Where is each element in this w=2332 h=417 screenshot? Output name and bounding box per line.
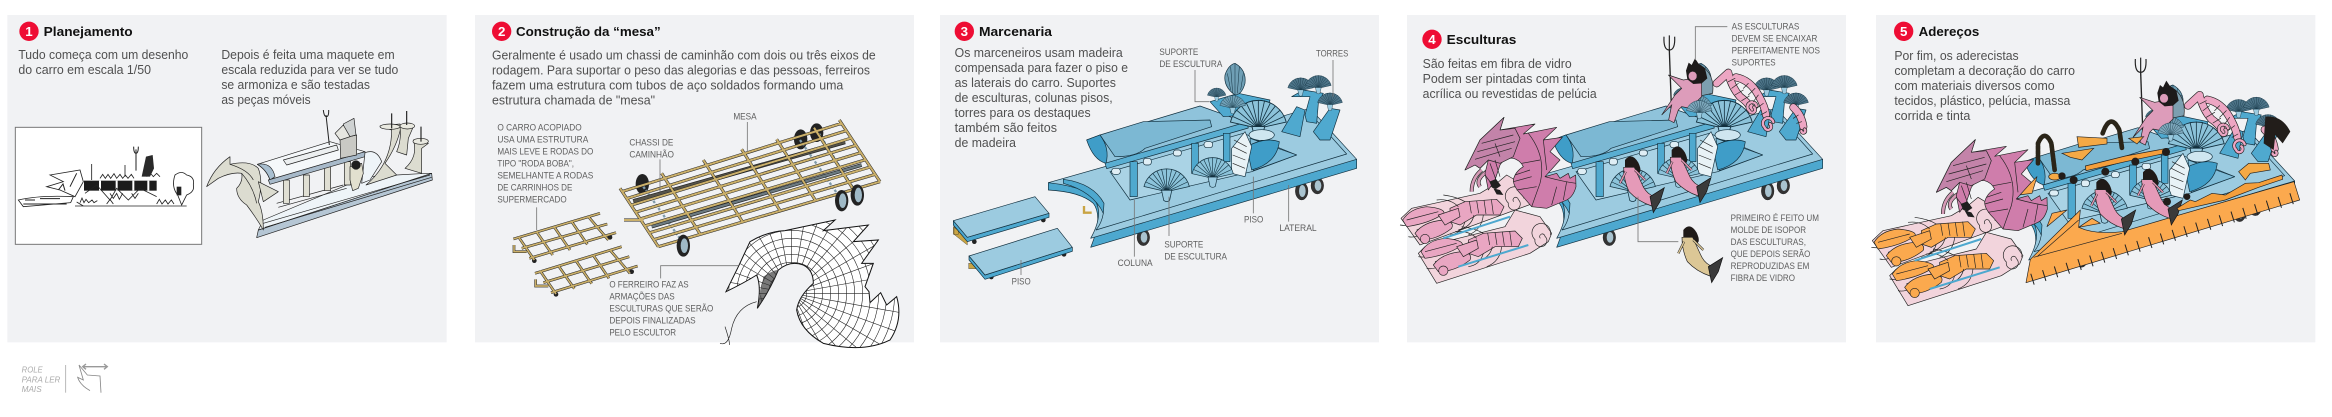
label: molde de isopor: DAS ESCULTURAS, [1731,237,1806,247]
label: molde de isopor: QUE DEPOIS SERÃO [1731,249,1810,259]
label: as esculturas devem se encaixar: SUPORTES [1732,57,1776,67]
label: mesa: MESA [733,111,757,121]
label: carro acoplado: MAIS LEVE E RODAS DO [497,147,593,157]
panel: 5 Adereços [1871,15,2315,342]
label: as esculturas devem se encaixar: PERFEITAMENTE NOS [1732,45,1820,55]
label: as esculturas devem se encaixar [1695,21,1820,67]
wire armature of dragon sculpture [720,219,900,348]
text block: fibra de vidro: acrílica ou revestidas de pelúcia [1423,87,1598,101]
label: mesa [733,111,757,152]
panel: 1 Planejamento [7,15,447,394]
label: suporte de escultura bottom: SUPORTE [1164,240,1203,250]
panel: 3 Marcenaria [940,15,1379,342]
number badge 2 [492,22,511,41]
dark ornaments on rail [2058,148,2190,206]
sculptures in colour with orange lobsters [1871,58,2277,306]
label: ferreiro: O FERREIRO FAZ AS [609,280,689,290]
label: ferreiro: ESCULTURAS QUE SERÃO [609,304,713,314]
label: molde de isopor [1638,197,1819,283]
scroll hint: MAIS [22,384,42,394]
label: molde de isopor: MOLDE DE ISOPOR [1731,225,1806,235]
text block: marceneiros: de madeira [955,136,1017,150]
label: carro acoplado: USA UMA ESTRUTURA [497,135,588,145]
label: molde de isopor: PRIMEIRO É FEITO UM [1731,213,1819,223]
text block: marceneiros: torres para os destaques [955,106,1091,120]
label: torres [1316,49,1348,97]
label: carro acoplado [497,123,593,230]
orange decorated skirt [2019,177,2300,283]
label: carro acoplado: TIPO "RODA BOBA", [497,159,574,169]
label: carro acoplado: O CARRO ACOPIADO [497,123,582,133]
text block: aderecistas: com materiais diversos como [1894,79,2055,93]
decorative arches [2038,122,2122,170]
label: chassi de caminhão: CAMINHÃO [629,150,674,160]
label: suporte de escultura top: DE ESCULTURA [1159,59,1222,69]
label: piso dolly [1012,260,1031,287]
label: suporte de escultura top [1159,47,1222,102]
separate mermaid mould [1678,226,1723,283]
text block: maquete: se armoniza e são testadas [221,78,370,92]
truck chassis and mesa frame [620,120,880,257]
text block: fibra de vidro: São feitas em fibra de vidro [1423,57,1572,71]
text block: aderecistas: corrida e tinta [1894,109,1971,123]
panel: 2 Construção da mesa [475,15,914,348]
number badge 1 [19,22,39,41]
label: suporte de escultura top: SUPORTE [1159,47,1198,57]
label: suporte de escultura bottom [1164,197,1227,262]
label: ferreiro: ARMAÇÕES DAS [609,292,675,302]
label: carro acoplado: SEMELHANTE A RODAS [497,171,593,181]
text block: marceneiros: compensada para fazer o piso e [955,61,1128,75]
sketch of the float in a framed box [15,127,202,244]
text block: chassi: estrutura chamada de "mesa" [492,93,655,107]
scroll hint: PARA LER [22,374,60,384]
number badge 1: 1 [25,24,33,39]
text block: desenho: Tudo começa com um desenho [18,48,188,62]
float structure [1986,85,2295,269]
label: piso dolly: PISO [1012,277,1031,287]
number badge 2: 2 [498,24,505,39]
label: molde de isopor: FIBRA DE VIDRO [1731,273,1795,283]
text block: aderecistas: tecidos, plástico, pelúcia, massa [1894,94,2071,108]
label: coluna [1118,200,1153,268]
label: ferreiro: DEPOIS FINALIZADAS [609,316,696,326]
tow bar [1084,206,1092,213]
heading: Adereços: Adereços [1919,25,1979,39]
wooden float structure [1048,63,1357,247]
text block: marceneiros: Os marceneiros usam madeira [955,46,1124,60]
float structure [1514,63,1823,247]
text block: chassi: fazem uma estrutura com tubos de aço soldados formando uma [492,78,844,92]
number badge 3 [955,22,974,41]
label: carro acoplado: DE CARRINHOS DE [497,183,572,193]
heading: Construção da mesa: Construção da “mesa” [516,25,661,39]
sculptures: dragon, lobsters, Neptune, seahorses, mermaids [1400,35,1805,283]
label: carro acoplado: SUPERMERCADO [497,195,567,205]
text block: maquete: Depois é feita uma maquete em [221,48,395,62]
text block: aderecistas: completam a decoração do carro [1894,64,2075,78]
heading: Esculturas: Esculturas [1447,33,1516,47]
number badge 5: 5 [1900,24,1908,39]
label: chassi de caminhão: CHASSI DE [629,138,673,148]
label: ferreiro: PELO ESCULTOR [609,328,676,338]
text block: aderecistas: Por fim, os aderecistas [1894,49,2019,63]
text block: maquete: escala reduzida para ver se tudo [221,63,398,77]
panel: 4 Esculturas [1400,15,1846,342]
small dolly frames [513,213,638,297]
scroll hint [22,364,107,394]
text block: desenho: do carro em escala 1/50 [18,63,151,77]
hair trim at right [2264,117,2290,150]
label: chassi de caminhão [629,138,674,192]
number badge 3: 3 [961,24,968,39]
label: ferreiro [609,266,738,338]
text block: fibra de vidro: Podem ser pintadas com tinta [1423,72,1587,86]
label: piso: PISO [1244,214,1263,224]
scroll hint: ROLE [22,365,43,375]
number badge 4: 4 [1428,32,1436,47]
maquette of the float [207,110,432,238]
text block: chassi: rodagem. Para suportar o peso das alegorias e das pessoas, ferreiros [492,63,870,77]
label: as esculturas devem se encaixar: AS ESCULTURAS [1732,21,1799,31]
orange trim along the float [2049,137,2283,211]
wooden dolly platforms [953,197,1072,279]
label: molde de isopor: REPRODUZIDAS EM [1731,261,1809,271]
label: suporte de escultura bottom: DE ESCULTURA [1164,252,1227,262]
label: as esculturas devem se encaixar: DEVEM SE ENCAIXAR [1732,33,1818,43]
label: piso [1244,177,1263,224]
text block: chassi: Geralmente é usado um chassi de caminhão com dois ou três eixos de [492,48,876,62]
number badge 5 [1894,22,1913,41]
text block: marceneiros: também são feitos [955,121,1057,135]
text block: marceneiros: de esculturas, colunas pisos, [955,91,1113,105]
label: coluna: COLUNA [1118,258,1153,268]
label: lateral: LATERAL [1279,223,1317,233]
text block: marceneiros: as laterais do carro. Suportes [955,76,1116,90]
label: torres: TORRES [1316,49,1348,59]
label: lateral [1279,185,1317,233]
heading: Planejamento: Planejamento [44,25,133,39]
text block: maquete: as peças móveis [221,93,311,107]
number badge 4 [1422,30,1442,49]
heading: Marcenaria: Marcenaria [979,25,1053,39]
